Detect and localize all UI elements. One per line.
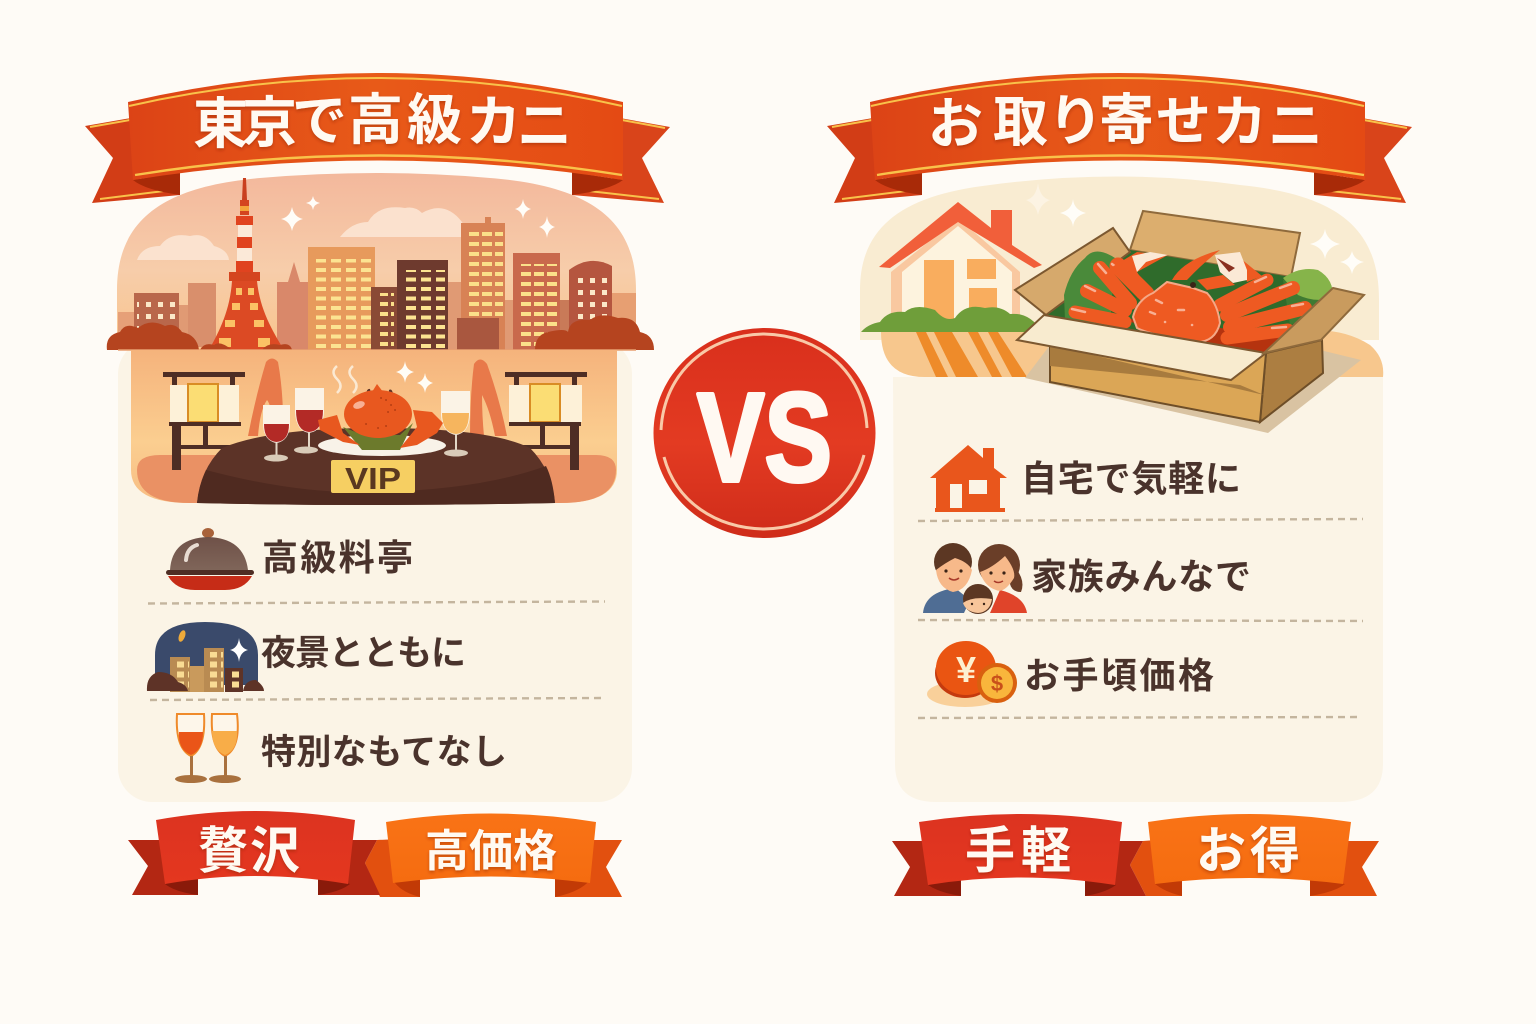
divider xyxy=(918,620,1363,621)
floor xyxy=(137,455,616,503)
left claw xyxy=(1112,252,1168,298)
banner: お取り寄せカニ xyxy=(827,73,1412,203)
list item: 自宅で気軽に xyxy=(930,445,1241,512)
list item: 高級料亭 xyxy=(166,528,413,590)
ground xyxy=(881,331,1383,377)
ribbon: 手軽 xyxy=(892,814,1146,896)
panel body left xyxy=(118,340,632,802)
ribbon: 高価格: 高価格 xyxy=(425,827,557,876)
divider xyxy=(918,717,1360,718)
list item: お手頃価格: お手頃価格 xyxy=(1024,655,1214,696)
crab body xyxy=(1133,282,1220,342)
sparkles xyxy=(281,196,555,238)
badge: VS xyxy=(654,328,876,538)
box interior xyxy=(1046,250,1333,353)
illustration: Tokyo skyline at dusk xyxy=(107,173,654,350)
panel: mail-order crab xyxy=(827,73,1412,896)
bushes xyxy=(107,315,654,350)
crab xyxy=(318,384,443,450)
sparkles xyxy=(396,361,433,393)
list item: 特別なもてなし: 特別なもてなし xyxy=(261,733,507,772)
plate xyxy=(318,435,446,456)
ribbon: 高価格 xyxy=(365,814,622,897)
box side xyxy=(1260,340,1323,422)
background buildings xyxy=(118,217,636,350)
ribbon: お得: お得 xyxy=(1196,823,1300,879)
box shadow xyxy=(1025,345,1361,433)
divider xyxy=(918,519,1363,521)
right flap xyxy=(1264,288,1364,353)
panel body right xyxy=(893,377,1383,802)
list item: 自宅で気軽に: 自宅で気軽に xyxy=(1021,458,1241,499)
ribbon: 贅沢 xyxy=(128,811,380,895)
icon: night view xyxy=(147,622,264,692)
table xyxy=(197,428,555,505)
lantern left xyxy=(163,372,245,470)
ribbon: 手軽: 手軽 xyxy=(965,823,1071,879)
steam xyxy=(334,366,356,393)
left flap xyxy=(1015,228,1130,315)
bushes xyxy=(861,307,1042,332)
banner: お取り寄せカニ: お取り寄せカニ xyxy=(928,89,1323,157)
list item: お手頃価格 xyxy=(927,641,1214,707)
icon: two glasses xyxy=(175,714,241,783)
badge: VIP: VIP xyxy=(345,461,401,496)
icon: Tokyo Tower xyxy=(209,178,284,350)
list item: 家族みんなで: 家族みんなで xyxy=(1031,556,1251,597)
icon: family xyxy=(923,543,1027,614)
sparkles xyxy=(1026,183,1364,274)
front flap xyxy=(1017,315,1266,380)
badge: VS: VS xyxy=(697,367,832,508)
badge: VIP xyxy=(331,460,415,496)
icon: coins xyxy=(927,641,1017,707)
icon: coins: $ xyxy=(991,671,1003,696)
under crab shadow xyxy=(1120,318,1290,353)
crab xyxy=(1072,250,1305,353)
list item: 家族みんなで xyxy=(923,543,1251,614)
illustration: VIP dining table xyxy=(131,350,617,505)
box front xyxy=(1050,345,1266,422)
clouds xyxy=(137,207,467,260)
right claw xyxy=(1172,250,1220,280)
ribbon: お得 xyxy=(1130,814,1379,896)
list item: 夜景とともに: 夜景とともに xyxy=(261,634,466,673)
arches xyxy=(248,358,283,436)
stripes xyxy=(916,332,1027,377)
lantern right xyxy=(505,372,587,470)
divider xyxy=(148,602,605,604)
icon: home xyxy=(930,445,1007,512)
banner: 東京で高級カニ xyxy=(85,73,670,203)
ribbon: 贅沢: 贅沢 xyxy=(198,823,300,879)
illustration: crab in box xyxy=(1015,211,1364,433)
icon: coins: ¥ xyxy=(956,649,976,690)
banner: 東京で高級カニ: 東京で高級カニ xyxy=(193,89,572,157)
lettuce xyxy=(1064,252,1115,325)
icon: cloche xyxy=(166,528,254,590)
divider xyxy=(150,698,603,700)
illustration background xyxy=(860,176,1379,340)
panel: Tokyo luxury crab xyxy=(85,73,670,897)
list item: 夜景とともに xyxy=(147,622,466,692)
illustration: house xyxy=(861,202,1042,332)
back flap xyxy=(1130,211,1300,277)
glasses xyxy=(263,388,470,462)
list item: 特別なもてなし xyxy=(175,714,507,783)
list item: 高級料亭: 高級料亭 xyxy=(262,537,413,578)
